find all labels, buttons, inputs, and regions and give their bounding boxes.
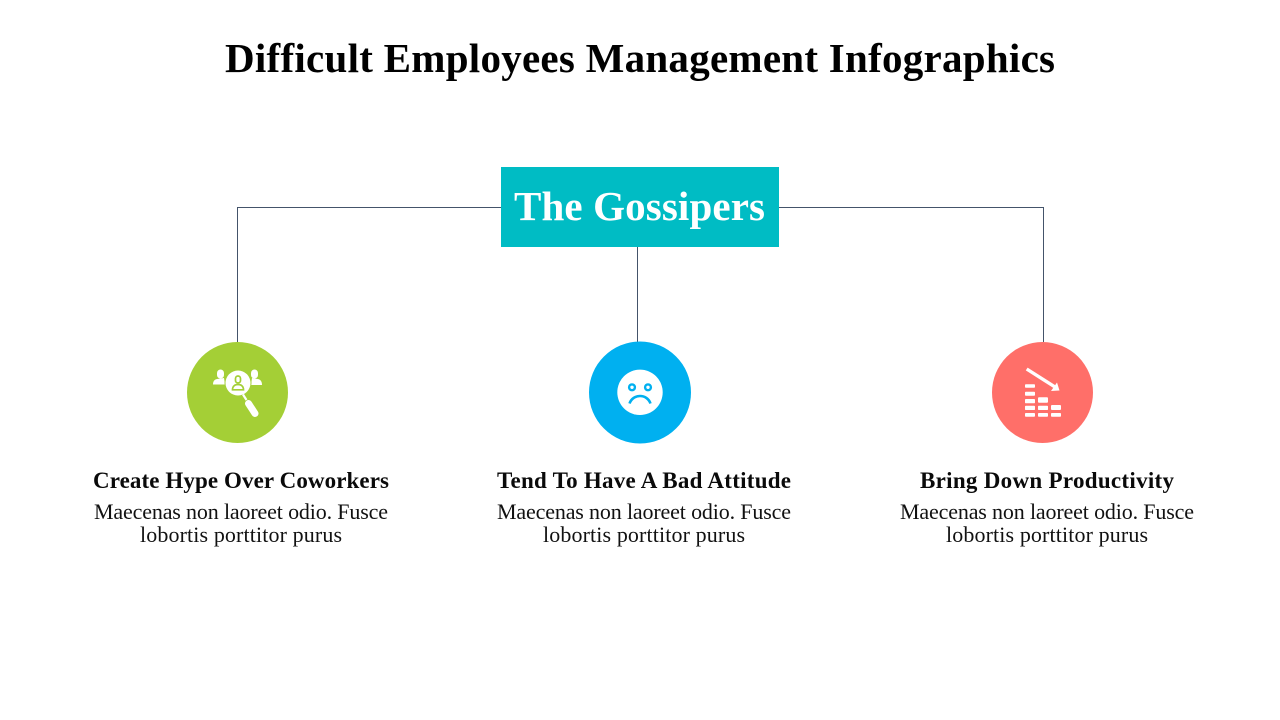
icon: falling bar chart on red circle	[992, 342, 1093, 443]
icon: sad face on blue circle	[589, 342, 691, 444]
icon: magnifier over people on green circle	[187, 342, 288, 443]
central box: The Gossipers	[501, 167, 779, 247]
description: lobortis porttitor purus	[140, 522, 342, 547]
heading: Create Hype Over Coworkers	[93, 468, 389, 493]
description: Maecenas non laoreet odio. Fusce	[497, 499, 791, 524]
description: Maecenas non laoreet odio. Fusce	[900, 499, 1194, 524]
central box: The Gossipers: The Gossipers	[514, 183, 765, 229]
heading: Tend To Have A Bad Attitude	[497, 468, 791, 493]
column 1: create hype	[93, 342, 389, 547]
description: lobortis porttitor purus	[946, 522, 1148, 547]
description: Maecenas non laoreet odio. Fusce	[94, 499, 388, 524]
connector lines	[238, 208, 1044, 344]
heading: Bring Down Productivity	[920, 468, 1174, 493]
description	[94, 499, 388, 547]
title: Difficult Employees Management Infographics	[225, 35, 1055, 81]
description: lobortis porttitor purus	[543, 522, 745, 547]
column 2: bad attitude	[497, 342, 791, 547]
description	[900, 499, 1194, 547]
column 3: productivity	[900, 342, 1194, 547]
description	[497, 499, 791, 547]
